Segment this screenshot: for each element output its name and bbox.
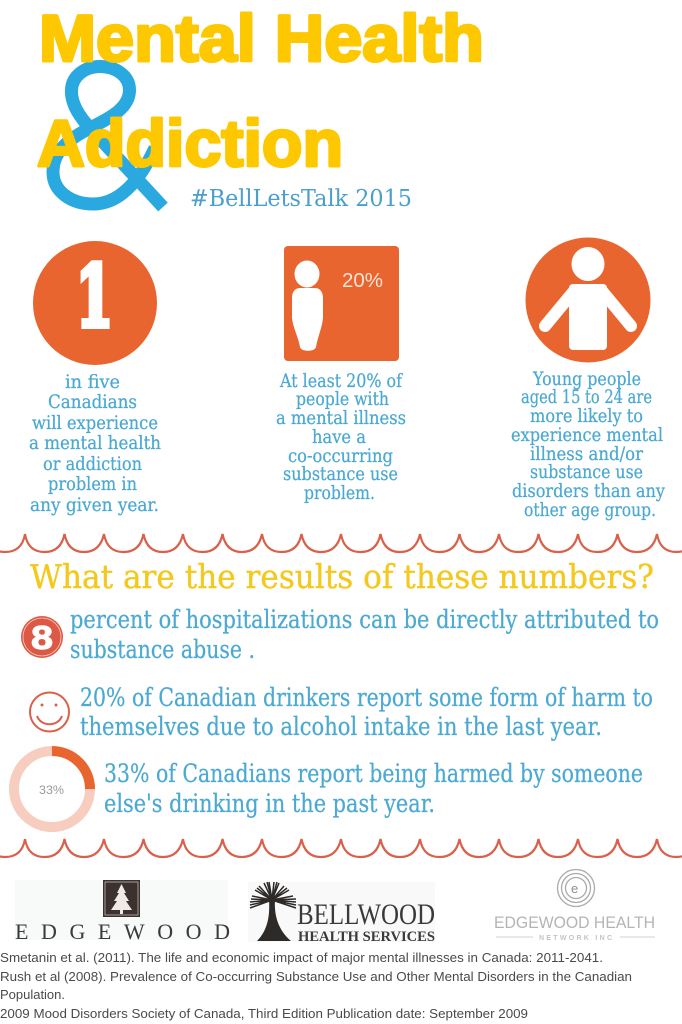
text: co-occurring: problem.	[304, 482, 375, 504]
panel: co-occurring	[276, 246, 406, 504]
text: young people: Young people	[532, 368, 641, 390]
text: young people: illness and/or	[530, 443, 644, 465]
icon: number one in circle: 1	[76, 247, 113, 346]
text: one in five: a mental health	[29, 432, 161, 454]
logo: Edgewood: EDGEWOOD	[15, 919, 230, 944]
icon: blue ampersand	[53, 66, 163, 207]
references: 2009 Mood Disorders Society of Canada, Third Edition Publication date: September 2009	[0, 1007, 528, 1021]
result: drinkers	[30, 683, 653, 741]
text: drinkers: themselves due to alcohol intake in the last year.	[80, 712, 602, 741]
icon: person in circle	[526, 238, 650, 362]
text: co-occurring	[276, 370, 406, 504]
references: Smetanin et al. (2011). The life and economic impact of major mental illnesses in Canada: 2011-2041.	[0, 951, 603, 965]
text: one in five: or addiction	[43, 453, 142, 475]
text: one in five: will experience	[32, 412, 158, 434]
references: Rush et al (2008). Prevalence of Co-occurring Substance Use and Other Mental Disorders in the Canadian	[0, 970, 632, 984]
text: one in five: any given year.	[30, 494, 159, 516]
logo: Edgewood Health Network: e	[571, 881, 578, 896]
text: hospitalizations: substance abuse .	[70, 635, 255, 664]
logo: Edgewood	[15, 880, 230, 944]
result: harmed by others	[14, 751, 643, 827]
text: co-occurring: co-occurring	[288, 445, 393, 467]
chart: donut 33 percent	[14, 751, 90, 827]
text: one in five	[29, 371, 161, 516]
logo: Bellwood: HEALTH SERVICES	[298, 929, 435, 945]
text: harmed by others	[104, 759, 643, 818]
logo: Bellwood	[248, 882, 435, 945]
logo: Bellwood: BELLWOOD	[297, 898, 435, 931]
icon: number eight badge	[21, 616, 63, 658]
references	[0, 951, 632, 1021]
text: one in five: Canadians	[48, 391, 137, 413]
text: young people: other age group.	[524, 499, 656, 521]
text: drinkers	[80, 683, 653, 741]
panel: one in five	[29, 241, 161, 516]
logo: Edgewood Health Network: EDGEWOOD HEALTH	[494, 913, 655, 932]
title	[37, 1, 484, 180]
icon: person with 20 percent	[284, 246, 399, 361]
text: co-occurring: have a	[312, 426, 366, 448]
icon: smiley	[30, 692, 69, 732]
text: harmed by others: else's drinking in the past year.	[104, 789, 435, 818]
text: co-occurring: people with	[296, 388, 389, 410]
icon: number one in circle	[33, 241, 157, 365]
references: Population.	[0, 988, 65, 1002]
chart: donut 33 percent: 33%	[39, 783, 64, 797]
logo: Edgewood Health Network	[494, 870, 655, 942]
title: Addiction	[37, 106, 343, 180]
text: young people	[511, 368, 665, 521]
icon: number eight badge: 8	[31, 619, 53, 656]
title: Mental Health	[39, 1, 484, 75]
text: young people: more likely to	[530, 405, 643, 427]
scalloped divider bottom	[0, 839, 682, 857]
text: co-occurring: substance use	[283, 463, 398, 485]
icon: person with 20 percent: 20%	[342, 270, 383, 292]
result: hospitalizations	[21, 605, 659, 664]
panel: young people	[511, 238, 665, 521]
text: co-occurring: a mental illness	[276, 407, 406, 429]
text: one in five: in five	[65, 371, 120, 393]
text: young people: substance use	[530, 461, 643, 483]
subtitle hashtag: #BellLetsTalk 2015	[190, 186, 412, 212]
text: one in five: problem in	[48, 473, 137, 495]
heading: results: What are the results of these numbers?	[30, 557, 654, 596]
logo: Edgewood Health Network: NETWORK INC	[539, 935, 612, 942]
text: co-occurring: At least 20% of	[279, 370, 404, 392]
text: hospitalizations	[70, 605, 659, 664]
scalloped divider top	[0, 534, 682, 552]
